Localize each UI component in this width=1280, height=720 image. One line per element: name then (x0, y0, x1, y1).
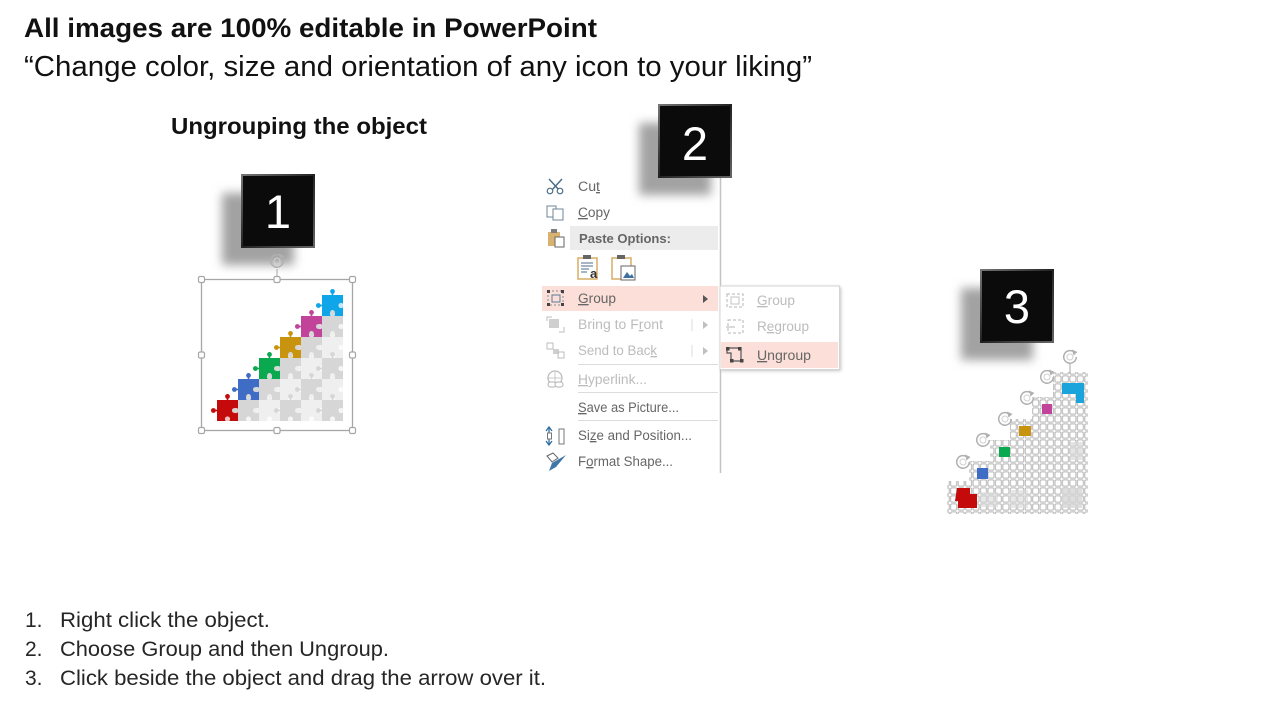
number badge 3 (961, 269, 1054, 360)
title: “Change color, size and orientation of any icon to your liking” (24, 51, 812, 83)
menu item: group (highlighted) (542, 286, 718, 311)
rotate handles (957, 350, 1078, 468)
step 3: ungrouped puzzle graphic (947, 269, 1088, 514)
menu item: format shape (547, 453, 673, 471)
menu item: bring to front: Bring to Front (578, 317, 663, 332)
title: All images are 100% editable in PowerPoint (24, 13, 597, 43)
menu item: bring to front (547, 317, 708, 332)
menu divider (720, 178, 722, 473)
menu item: paste options (548, 226, 718, 250)
number badge 2: 2 (682, 117, 708, 170)
number badge 3: 3 (1004, 280, 1030, 333)
submenu item: regroup: Regroup (757, 319, 809, 334)
number badge 2 (639, 104, 732, 195)
instructions list: 1. (25, 609, 43, 632)
instructions list: 2. (25, 638, 43, 661)
instructions list: Click beside the object and drag the arrow over it. (60, 667, 546, 690)
menu item: group (highlighted): Group (578, 291, 616, 306)
menu item: size and position: Size and Position... (578, 428, 692, 443)
menu item: size and position (546, 427, 692, 445)
puzzle staircase (211, 289, 344, 422)
instructions list: Choose Group and then Ungroup. (60, 638, 389, 661)
submenu item: ungroup (highlighted): Ungroup (757, 348, 811, 363)
menu item: format shape: Format Shape... (578, 454, 673, 469)
selection frame with handles (198, 254, 356, 434)
menu item: send to back (547, 343, 708, 358)
submenu item: group: Group (757, 293, 795, 308)
paste option icons: a (590, 266, 598, 281)
instructions list: Right click the object. (60, 609, 270, 632)
title (24, 13, 812, 83)
menu item: copy (547, 205, 610, 220)
menu item: hyperlink (548, 371, 647, 387)
paste option icons (578, 255, 635, 281)
step 1: selected puzzle graphic (198, 174, 356, 434)
heading: ungrouping the object: Ungrouping the object (171, 113, 427, 139)
menu item: send to back: Send to Back (578, 343, 657, 358)
coloured piece fragments (955, 383, 1084, 508)
menu item: hyperlink: Hyperlink... (578, 372, 647, 387)
menu item: save as picture: Save as Picture... (578, 400, 679, 415)
menu item: copy: Copy (578, 205, 610, 220)
menu item: cut: Cut (578, 179, 600, 194)
menu item: paste options: Paste Options: (579, 231, 671, 246)
number badge 1: 1 (265, 185, 291, 238)
menu item: cut (547, 179, 600, 194)
submenu (720, 286, 841, 371)
instructions list: 3. (25, 667, 43, 690)
step 2: context menu (542, 104, 841, 473)
number badge 1 (222, 174, 315, 265)
instructions list (25, 609, 546, 690)
ungrouped handles grid (947, 372, 1088, 514)
